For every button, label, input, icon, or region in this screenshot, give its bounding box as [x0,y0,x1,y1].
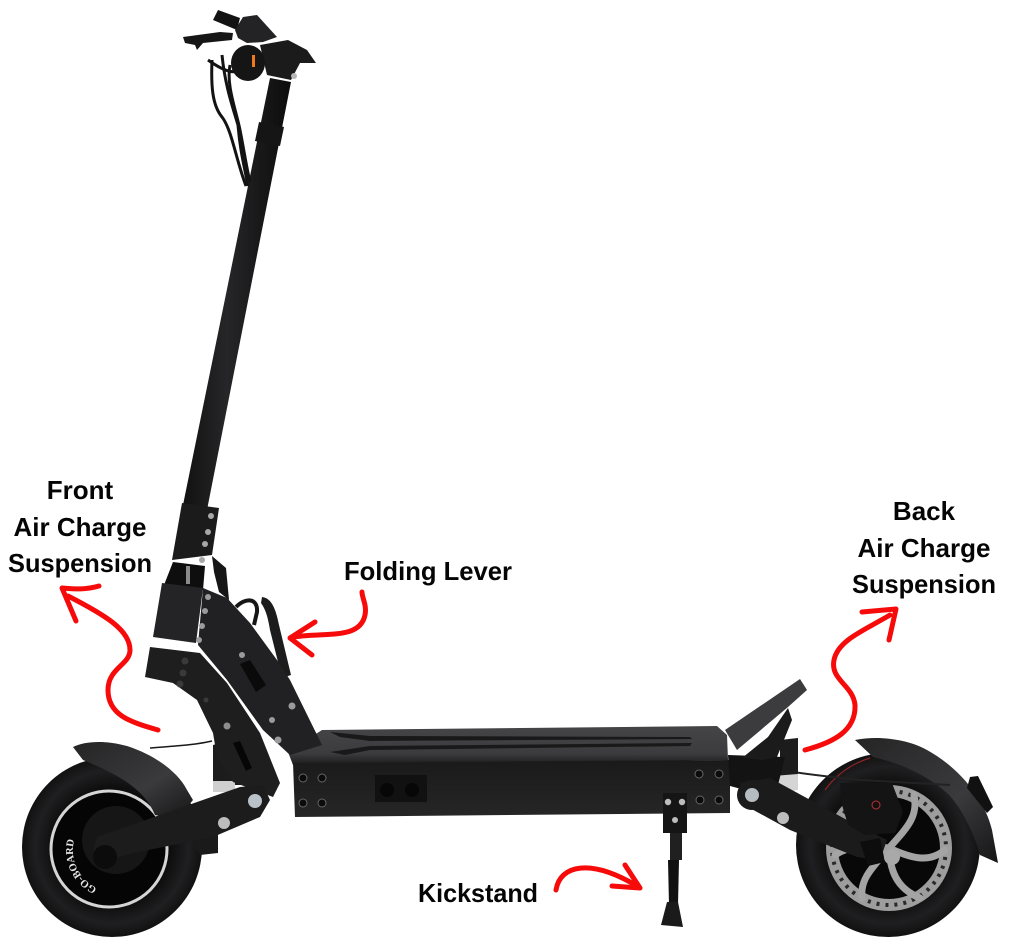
side plate [196,588,322,755]
pivot bolt [248,794,262,808]
caliper body [840,783,903,835]
battery box [293,760,730,817]
tire red line [825,758,870,790]
stem collar ring [255,122,284,146]
label: front suspension: Suspension [8,548,152,578]
back swing arm [737,778,887,860]
throttle pod [213,10,240,30]
bracket [663,793,687,833]
stem clamp collar [172,503,219,563]
kickstand [661,793,687,927]
bracket bolts [665,799,671,805]
rear frame connector [728,755,785,790]
plate body [198,588,322,755]
clamp [260,40,316,80]
label: back suspension [852,496,996,599]
axle [93,845,117,869]
collar bolts [199,513,214,563]
display [235,15,277,43]
disc spokes [835,795,945,898]
rear plate hinge [742,708,792,760]
brake cable [150,741,212,748]
lower tube [164,562,205,590]
shock label [213,781,235,792]
axle nut [860,838,885,866]
back hub [884,849,900,865]
orange indicator [252,55,255,67]
arm pivot [737,780,767,810]
plate window [240,660,266,692]
deck [288,726,730,817]
arm body [145,647,280,797]
lower bracket [185,820,218,855]
fender light [967,776,993,813]
tube body [164,562,205,590]
rear plate [725,679,807,750]
spring [670,833,682,860]
folding hinge head [153,583,203,643]
port caps [380,783,394,797]
upper stem [183,78,291,510]
shock body [213,740,245,785]
arm body [740,778,887,860]
deck top plate [288,726,728,765]
rear strap [212,556,229,600]
shock body [780,738,798,790]
label: front suspension: Air Charge [14,512,146,542]
loop handle [236,600,257,625]
arm bolt [218,817,230,829]
rim lettering: GO-BOARD [66,840,96,893]
shock sleeve [770,774,798,795]
leg [668,860,679,905]
arm body [93,785,270,860]
brake lever [183,32,233,50]
label: front suspension: Front [47,475,114,505]
folding lever handle [261,597,291,678]
port plate [375,775,427,802]
arm bolt [777,812,789,824]
label: front suspension [8,475,152,578]
tube highlight [186,566,190,584]
cable bundle [208,55,250,186]
clamp bolt [291,73,297,79]
front tire [22,757,202,937]
box bolts [299,770,723,807]
rear cable [740,762,950,785]
plate bolts [196,594,296,744]
lower arm [145,647,280,797]
pivot bolt [745,788,759,802]
arm slot [233,741,252,771]
collar body [172,503,219,560]
arrow: front suspension [62,586,158,730]
back fender [855,738,998,863]
label: folding lever: Folding Lever [344,556,512,586]
label: back suspension: Air Charge [858,533,990,563]
switch body [231,45,265,81]
charge ports [375,775,427,802]
brake disc [832,791,946,905]
label: back suspension: Back [893,496,956,526]
deck grooves [330,732,692,755]
label: back suspension: Suspension [852,569,996,599]
label: kickstand: Kickstand [418,878,538,908]
arm bolts [176,658,230,730]
back tire [796,753,980,937]
brake caliper [840,783,903,866]
front shock [213,740,245,792]
front swing arm [93,785,270,869]
front hub motor [82,806,150,874]
handlebar [183,10,316,81]
foot [661,902,683,927]
back shock [770,738,798,795]
back wheel [796,753,980,937]
disc holes [832,791,946,905]
front rim [51,791,167,907]
front wheel [22,761,202,937]
arrow: kickstand [556,865,640,890]
front fender [73,742,193,818]
fender shell [855,738,998,863]
arrow: back suspension [805,609,896,750]
arrow: folding lever [290,592,365,655]
caliper bolt ring [872,801,880,809]
